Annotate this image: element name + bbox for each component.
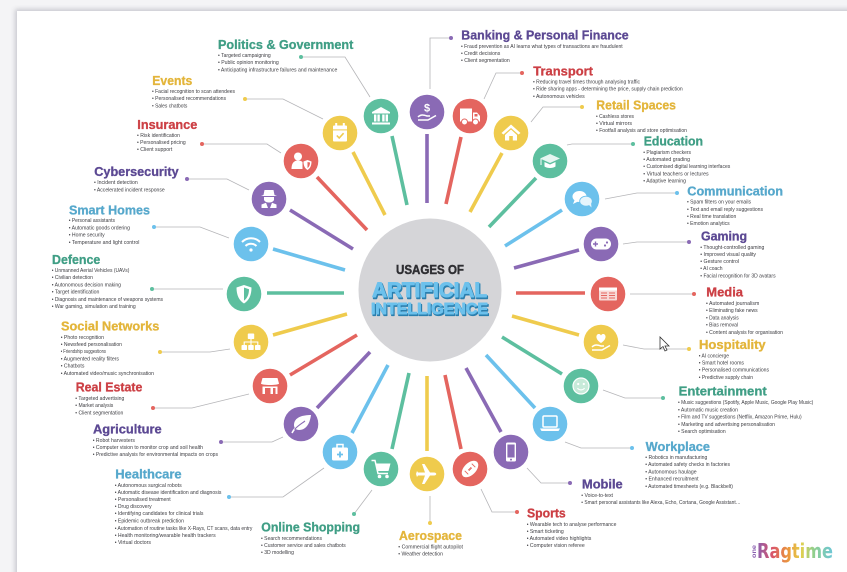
panel: Entertainment: • Search optimisation [678,429,726,435]
panel: Transport: Transport [533,64,594,78]
panel: Insurance: • Personalised pricing [137,140,186,146]
panel: Defence [52,253,344,311]
panel: Politics & Government: • Anticipating infrastructure failures and maintenance [218,68,337,74]
panel: Banking & Personal Finance: $ [424,102,430,114]
panel: Cybersecurity: • Incident detection [94,180,138,186]
panel: Workplace: • Robotics in manufacturing [645,455,707,461]
logo: oneRagtime: one [752,544,758,558]
panel: Hospitality: • Predictive supply chain [699,375,753,381]
panel: Online Shopping: Online Shopping [261,521,360,535]
panel: Healthcare: • Virtual doctors [115,540,151,546]
title: artificial intelligence: INTELLIGENCE [371,301,488,318]
panel: Defence: Defence [52,253,100,267]
panel: Politics & Government: Politics & Government [218,38,354,52]
panel: Hospitality: • Personalised communications [699,368,769,374]
panel: Healthcare: • Epidemic outbreak prediction [115,518,184,524]
panel: Banking & Personal Finance: • Client segmentation [461,58,510,64]
panel: Workplace [486,355,733,490]
panel: Smart Homes: • Personal assistants [69,218,115,224]
panel: Retail Spaces [470,99,687,212]
panel: Media: • Automated journalism [706,301,760,307]
panel: Social Networks: • Automated video/music synchronisation [61,371,154,377]
panel: Hospitality: • Smart hotel rooms [699,360,744,366]
panel: Sports: Sports [527,506,566,520]
panel: Social Networks: • Newsfeed personalisation [61,342,122,348]
panel: Insurance: Insurance [137,118,197,132]
panel: Social Networks: • Photo recognition [61,335,104,341]
panel: Aerospace: Aerospace [399,529,462,543]
panel: Agriculture: Agriculture [93,422,162,436]
panel: Defence: • War gaming, simulation and training [52,304,136,310]
panel: Entertainment: • Film and TV suggestions (Netflix, Amazon Prime, Hulu) [678,414,802,420]
panel: Mobile: • Voice-to-text [581,493,613,499]
panel: Healthcare: Healthcare [115,467,182,481]
panel: Mobile [466,368,741,506]
panel: Insurance: • Risk identification [137,133,180,139]
panel: Events: Events [152,74,192,88]
panel: Real Estate: • Market analysis [75,403,114,409]
panel: Social Networks: Social Networks [61,320,159,334]
panel: Online Shopping: • 3D modelling [261,550,294,556]
panel: Workplace: • Enhanced recruitment [645,476,699,482]
panel: Education: • Customised digital learning interfaces [643,164,731,170]
panel: Media: • Bias removal [706,322,738,328]
panel: Gaming: • Thought-controlled gaming [700,245,764,251]
panel: Politics & Government: • Public opinion monitoring [218,60,279,66]
panel: Agriculture: • Predictive analysis for environmental impacts on crops [93,452,218,458]
panel: Entertainment: Entertainment [679,385,768,399]
panel: Aerospace: • Weather detection [398,552,443,558]
panel: Insurance [137,118,367,230]
panel: Entertainment [502,337,813,435]
panel: Cybersecurity [94,165,353,249]
panel: Retail Spaces: • Cashless stores [596,114,634,120]
panel: Banking & Personal Finance: • Credit decisions [461,51,501,57]
panel: Defence: • Civilian detection [52,275,93,281]
title: artificial intelligence: ARTIFICIAL [372,279,487,302]
panel: Transport: • Reducing travel times through analysing traffic [533,80,640,86]
panel: Healthcare: • Drug discovery [115,504,152,510]
panel: Real Estate [75,335,357,416]
panel: Cybersecurity: Cybersecurity [94,165,179,179]
panel: Healthcare: • Automation of routine tasks like X-Rays, CT scans, data entry [115,526,253,532]
panel: Social Networks: • Augmented reality filters [61,356,119,362]
panel: Politics & Government: • Targeted campaigning [218,53,271,59]
panel: Banking & Personal Finance: • Fraud prevention as AI learns what types of transactions are fraudulent [461,44,623,50]
panel: Politics & Government [218,38,407,205]
panel: Events: • Sales chatbots [152,104,188,110]
panel: Aerospace: • Commercial flight autopilot [398,544,463,550]
panel: Media: • Content analysis for organisation [706,330,783,336]
panel: Cybersecurity: • Accelerated incident response [94,188,165,194]
panel: Transport: • Ride sharing apps - determining the price, supply chain prediction [533,86,683,92]
panel: Mobile: • Smart personal assistants like Alexa, Echo, Cortana, Google Assistant… [581,500,741,506]
panel: Smart Homes: • Home security [69,232,105,238]
panel: Events [152,74,385,215]
panel: Online Shopping [261,373,409,556]
panel: Social Networks [61,314,347,377]
panel: Gaming: • Facial recognition for 3D avatars [700,274,776,280]
panel: Workplace: • Autonomous haulage [645,470,697,476]
panel: Defence: • Unmanned Aerial Vehicles (UAVs) [52,268,130,274]
panel: Smart Homes: Smart Homes [69,203,150,217]
panel: Agriculture [93,352,370,458]
panel: Sports: • Automated video highlights [527,536,592,542]
panel: Agriculture: • Robot harvesters [93,438,135,444]
panel: Smart Homes: • Automatic goods ordering [69,226,130,232]
panel: Media: • Data analysis [706,316,739,322]
title: usages of: USAGES OF [396,262,464,277]
panel: Hospitality: Hospitality [699,338,766,352]
panel: Banking & Personal Finance: Banking & Personal Finance [461,28,629,42]
panel: Gaming [514,227,776,280]
title: artificial intelligence: INTELLIGENCE [372,302,489,320]
panel: Entertainment: • Music suggestions (Spotify, Apple Music, Google Play Music) [678,400,813,406]
panel: Hospitality: • AI concierge [699,354,729,360]
panel: Workplace: Workplace [646,440,710,454]
panel: Gaming: • Improved visual quality [700,252,756,258]
panel: Education: • Plagiarism checkers [643,150,691,156]
panel: Communication: • Text and email reply suggestions [687,207,763,213]
panel: Healthcare: • Autonomous surgical robots [115,483,182,489]
panel: Events: • Facial recognition to scan attendees [152,89,235,95]
panel: Real Estate: Real Estate [76,381,142,395]
panel: Communication: • Emotion analytics [687,221,730,227]
panel: Entertainment: • Marketing and advertising personalisation [678,422,775,428]
panel: Communication: • Spam filters on your emails [687,200,751,206]
panel: Defence: • Diagnosis and maintenance of weapons systems [52,297,163,303]
panel: Retail Spaces: • Footfall analysis and store optimisation [596,128,687,134]
panel: Banking & Personal Finance [410,28,629,203]
panel: Healthcare: • Health monitoring/wearable health trackers [115,533,216,539]
panel: Sports: • Computer vision referee [527,543,585,549]
panel: Healthcare [115,365,388,546]
panel: Hospitality [512,316,769,381]
panel: Gaming: • AI coach [700,266,723,272]
panel: Transport [446,64,683,204]
panel: Education: • Adaptive learning [643,178,686,184]
panel: Media: • Eliminating fake news [706,308,758,314]
panel: Real Estate: • Client segmentation [75,410,123,416]
panel: Defence: • Target identification [52,290,99,296]
panel: Sports: • Smart ticketing [527,529,564,535]
panel: Insurance: • Client support [137,147,173,153]
panel: Workplace: • Automated safety checks in factories [645,462,730,468]
panel: Retail Spaces: • Virtual mirrors [596,121,632,127]
title: artificial intelligence [371,279,489,320]
panel: Aerospace [398,376,463,558]
panel: Sports [445,375,616,549]
panel: Smart Homes: • Temperature and light control [69,240,139,246]
panel: Online Shopping: • Search recommendations [261,536,322,542]
panel: Transport: • Autonomous vehicles [533,94,585,100]
central circle with title [358,218,502,362]
panel: Gaming: • Gesture control [700,259,739,265]
panel: Media: Media [706,286,744,300]
panel: Mobile: Mobile [582,477,623,491]
title: artificial intelligence: ARTIFICIAL [373,280,488,304]
panel: Healthcare: • Identifying candidates for clinical trials [115,511,204,517]
mouse cursor [660,337,669,351]
panel: Workplace: • Automated timesheets (e.g. Blackbelt) [645,484,733,490]
panel: Entertainment: • Automatic music creation [678,408,738,414]
panel: Sports: • Wearable tech to analyse performance [527,522,616,528]
panel: Social Networks: • Chatbots [61,364,85,370]
panel: Social Networks: • Friendship suggestions [61,349,106,355]
panel: Education: Education [644,135,703,149]
panel: Healthcare: • Automatic disease identification and diagnosis [115,490,222,496]
panel: Real Estate: • Targeted advertising [75,396,124,402]
panel: Education [489,135,731,227]
panel: Communication: Communication [687,184,783,198]
panel: Gaming: Gaming [701,230,747,244]
panel: Smart Homes [69,203,345,270]
panel: Communication [505,182,783,246]
panel: Online Shopping: • Customer service and sales chatbots [261,543,346,549]
panel: Media [516,277,783,336]
panel: Agriculture: • Computer vision to monitor crop and soil health [93,445,203,451]
panel: Defence: • Autonomous decision making [52,282,121,288]
panel: Events: • Personalised recommendations [152,96,226,102]
panel: Healthcare: • Personalised treatment [115,497,171,503]
panel: Communication: • Real time translation [687,214,736,220]
panel: Education: • Automated grading [643,157,690,163]
panel: Retail Spaces: Retail Spaces [596,99,676,113]
panel: Education: • Virtual teachers or lectures [643,172,709,178]
